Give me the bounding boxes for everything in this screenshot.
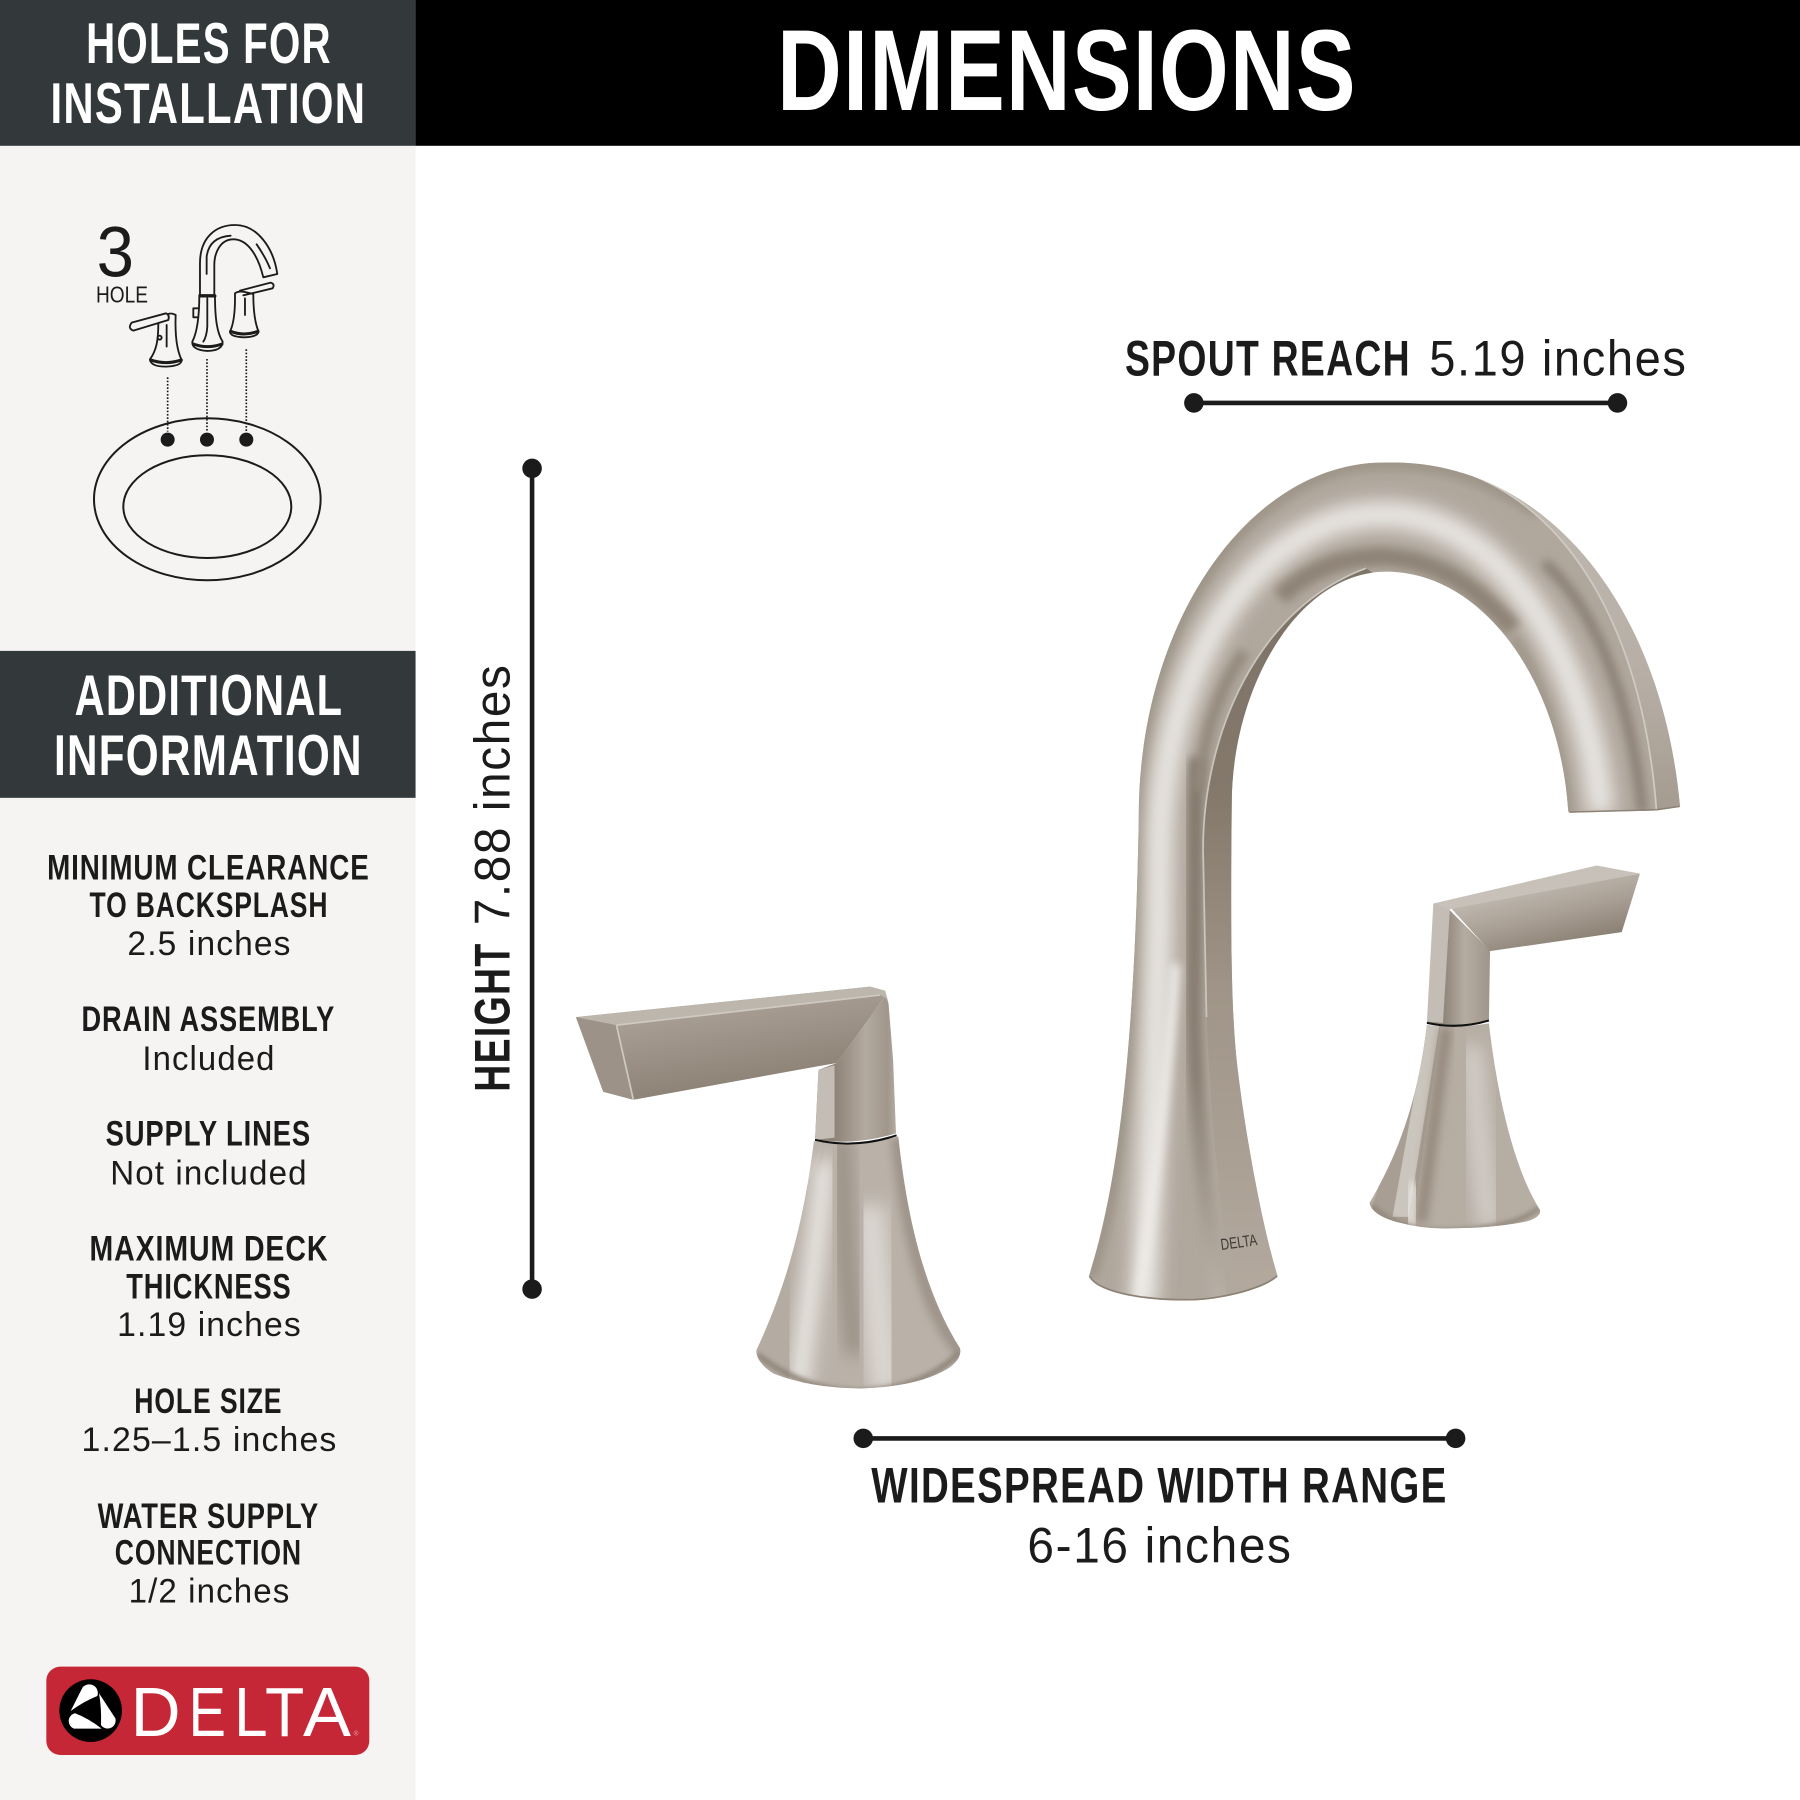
text block: supply lines: Not included [110, 1155, 308, 1193]
heading: additional information: INFORMATION [54, 724, 363, 788]
arrow: spout reach dimension line [1184, 393, 1627, 413]
text block: hole size [82, 1381, 338, 1459]
text block: drain assembly: DRAIN ASSEMBLY [82, 999, 335, 1039]
logo: delta: L [234, 1673, 268, 1751]
faucet: spout [1079, 453, 1693, 1309]
text block: maximum deck thickness: 1.19 inches [117, 1306, 302, 1344]
label: height [464, 664, 521, 1092]
text block: water supply connection: CONNECTION [115, 1533, 302, 1573]
heading: holes for installation: INSTALLATION [51, 72, 366, 136]
heading: dimensions banner: DIMENSIONS [777, 7, 1357, 135]
label: height: 7.88 inches [464, 664, 521, 925]
faucet: left handle [576, 987, 970, 1395]
icon: dotted guide lines [168, 349, 246, 432]
faucet: right handle [1360, 866, 1640, 1240]
text block: minimum clearance [47, 847, 370, 963]
faucet mark: delta: DELTA [1219, 1231, 1259, 1254]
text block: drain assembly [82, 999, 335, 1078]
icon label: 3 hole: HOLE [96, 281, 148, 307]
heading: dimensions banner [416, 0, 1800, 146]
label: height: HEIGHT [464, 942, 521, 1092]
arrow: widespread width dimension line [854, 1429, 1465, 1448]
text block: hole size: HOLE SIZE [134, 1381, 282, 1421]
label: spout reach: SPOUT REACH [1125, 329, 1411, 386]
text block: minimum clearance: MINIMUM CLEARANCE [47, 847, 370, 887]
text block: hole size: 1.25–1.5 inches [82, 1421, 338, 1459]
logo: delta: A [303, 1673, 351, 1751]
text block: water supply connection [98, 1496, 319, 1611]
label: spout reach: 5.19 inches [1429, 329, 1687, 386]
heading: additional information [0, 651, 416, 798]
label: widespread width range: 6-16 inches [1027, 1516, 1293, 1573]
text block: water supply connection: 1/2 inches [129, 1573, 290, 1611]
label: widespread width range: WIDESPREAD WIDTH RANGE [871, 1457, 1448, 1514]
label: spout reach [1125, 329, 1688, 386]
text block: minimum clearance: TO BACKSPLASH [90, 885, 328, 925]
panel: sidebar background [0, 0, 416, 1800]
text block: supply lines [106, 1114, 311, 1193]
icon: three hole faucet over sink diagram [94, 213, 321, 580]
logo: delta: T [265, 1673, 304, 1751]
logo: delta [46, 1667, 369, 1755]
text block: maximum deck thickness: THICKNESS [126, 1266, 292, 1306]
text block: minimum clearance: 2.5 inches [127, 925, 292, 963]
icon: sink basin [94, 418, 321, 580]
logo: delta: E [189, 1673, 226, 1751]
icon label: 3 hole: 3 [97, 213, 134, 293]
text block: water supply connection: WATER SUPPLY [98, 1496, 319, 1536]
heading: additional information: ADDITIONAL [75, 664, 343, 728]
arrow: height dimension line [522, 459, 542, 1299]
label: widespread width range [871, 1457, 1448, 1573]
heading: holes for installation: HOLES FOR [86, 12, 332, 76]
icon: mounting holes [161, 433, 253, 447]
text block: maximum deck thickness: MAXIMUM DECK [90, 1228, 328, 1268]
heading: holes for installation [0, 0, 416, 146]
text block: supply lines: SUPPLY LINES [106, 1114, 311, 1154]
icon label: 3 hole [96, 213, 148, 307]
icon: mini faucet set [130, 225, 277, 367]
logo: delta: D [131, 1673, 181, 1751]
text block: drain assembly: Included [142, 1040, 276, 1078]
text block: maximum deck thickness [90, 1228, 328, 1344]
logo: delta: ® [354, 1730, 359, 1738]
